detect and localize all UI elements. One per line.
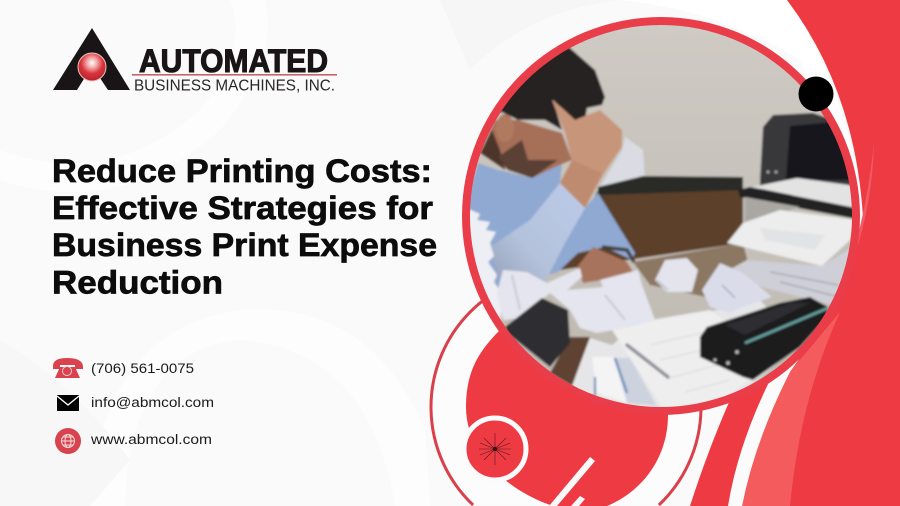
contact: website xyxy=(55,428,212,454)
photo circle xyxy=(460,17,860,420)
printer xyxy=(760,113,856,195)
white stripe xyxy=(728,368,792,506)
neck and face xyxy=(480,120,572,178)
logo wordmark: AUTOMATED xyxy=(139,43,328,79)
left paper pile xyxy=(470,208,502,320)
pen xyxy=(627,345,668,377)
title: Business Print Expense xyxy=(52,227,437,263)
title: Reduction xyxy=(52,264,223,300)
lower hand and watch xyxy=(577,247,633,283)
right red swoosh panel xyxy=(742,0,900,506)
light red band xyxy=(742,312,840,506)
white accent strokes xyxy=(549,457,595,506)
contact: email xyxy=(57,395,214,411)
logo xyxy=(53,28,337,94)
contact: email: info@abmcol.com xyxy=(91,395,214,410)
logo mark: triangle with red ball xyxy=(53,28,130,90)
sleeve xyxy=(490,183,585,290)
hand on forehead xyxy=(552,100,622,208)
hair xyxy=(500,48,606,130)
white desk sheets xyxy=(571,300,778,407)
logo subtitle: BUSINESS MACHINES, INC. xyxy=(134,78,335,94)
photo: stressed man at desk xyxy=(460,20,860,420)
crumpled paper balls xyxy=(655,258,698,292)
small starburst badge xyxy=(464,418,526,480)
lower circle decoration xyxy=(431,272,701,506)
lower swoosh bands xyxy=(690,312,840,506)
icon: envelope xyxy=(57,395,79,411)
faint highlight streak xyxy=(843,143,874,285)
shirt xyxy=(466,163,635,290)
top loose sheet xyxy=(727,210,856,266)
contact: website: www.abmcol.com xyxy=(90,432,212,447)
contact: phone: (706) 561-0075 xyxy=(91,361,194,376)
wood patch xyxy=(550,337,590,386)
desk surface xyxy=(633,243,750,300)
cabinet xyxy=(560,188,743,270)
icon: globe xyxy=(55,428,81,454)
lined document xyxy=(592,357,627,403)
black dot xyxy=(798,76,834,112)
left toner xyxy=(505,298,570,367)
title xyxy=(52,153,437,300)
right toner xyxy=(700,297,828,380)
title: Effective Strategies for xyxy=(52,190,433,226)
icon: telephone xyxy=(53,358,83,378)
back paper stack xyxy=(598,137,645,190)
red band xyxy=(690,380,770,506)
grey wall below tray xyxy=(745,197,800,225)
paper stack below xyxy=(732,248,849,305)
title: Reduce Printing Costs: xyxy=(52,153,432,189)
contact: phone xyxy=(53,358,194,378)
